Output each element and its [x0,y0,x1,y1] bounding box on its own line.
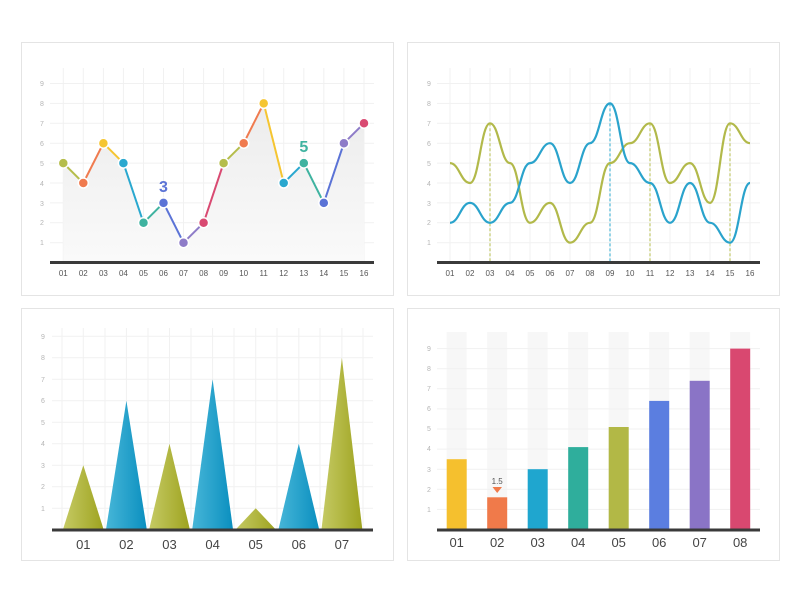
x axis labels: 03 [486,269,495,278]
x axis labels: 14 [319,269,329,278]
x axis labels: 04 [119,269,128,278]
x axis labels: 04 [205,537,220,552]
x axis labels: 07 [335,537,349,552]
y axis labels: 7 [427,386,431,393]
x axis labels: 05 [248,537,263,552]
y axis labels: 9 [427,81,431,88]
x axis labels: 02 [79,269,88,278]
y axis labels: 4 [40,181,44,188]
x axis labels: 08 [733,535,747,550]
x axis labels: 09 [219,269,229,278]
y axis labels [41,334,45,513]
panel: line chart [22,42,394,296]
y axis labels: 3 [427,467,431,474]
x axis labels: 05 [139,269,148,278]
y axis labels: 8 [427,101,431,108]
y axis labels: 8 [41,355,45,362]
data points [58,98,369,248]
y axis labels: 6 [427,406,431,413]
line segments [63,103,364,243]
x axis labels: 10 [626,269,635,278]
x axis labels: 12 [666,269,675,278]
x axis labels: 16 [360,269,369,278]
y axis labels: 5 [427,426,431,433]
x axis labels [76,537,349,552]
callout: 3: 3 [159,179,168,196]
x axis labels: 08 [586,269,595,278]
y axis labels: 7 [40,121,44,128]
callout: 1.5: 1.5 [492,477,503,486]
x axis labels [449,535,747,550]
y axis labels: 2 [427,487,431,494]
y axis labels: 9 [41,334,45,341]
green curve [450,123,750,243]
y axis labels: 3 [427,201,431,208]
y axis labels: 2 [41,484,45,491]
x axis labels: 13 [686,269,695,278]
y axis labels [427,81,431,247]
y axis labels: 3 [40,201,44,208]
y axis labels: 7 [41,377,45,384]
y axis labels: 1 [41,506,45,513]
triangles [63,358,362,530]
y axis labels: 9 [427,346,431,353]
x axis labels: 03 [162,537,177,552]
x axis labels: 02 [466,269,475,278]
blue curve [450,103,750,243]
y axis labels: 5 [41,420,45,427]
y axis labels: 8 [427,366,431,373]
x axis labels: 07 [179,269,188,278]
y axis labels: 4 [427,446,431,453]
x axis labels: 11 [260,269,268,278]
x axis labels: 04 [571,535,585,550]
x axis labels: 01 [59,269,68,278]
x axis labels: 11 [646,269,655,278]
x axis labels: 02 [490,535,504,550]
x axis labels: 12 [279,269,289,278]
y axis labels [40,81,44,247]
y axis labels: 6 [427,141,431,148]
x axis labels: 01 [446,269,455,278]
y axis labels: 5 [40,161,44,168]
y axis labels: 7 [427,121,431,128]
x axis labels: 09 [606,269,615,278]
x axis labels: 04 [506,269,515,278]
x axis labels: 06 [652,535,666,550]
x axis labels: 15 [339,269,349,278]
x axis labels: 08 [199,269,209,278]
x axis labels: 03 [99,269,108,278]
x axis labels: 13 [299,269,309,278]
dashed markers [490,103,730,262]
area fill [63,103,364,262]
x axis labels: 16 [746,269,755,278]
x axis labels: 06 [159,269,168,278]
x axis labels [59,269,369,278]
x axis labels [446,269,755,278]
x axis labels: 01 [76,537,91,552]
panel: smooth curves chart [408,42,780,296]
callout: 1.5 [492,477,503,493]
x axis labels: 06 [292,537,306,552]
x axis labels: 05 [611,535,626,550]
y axis labels: 2 [427,220,431,227]
x axis labels: 07 [692,535,707,550]
y axis labels: 6 [40,141,44,148]
y axis labels: 3 [41,463,45,470]
y axis labels: 5 [427,161,431,168]
x axis labels: 10 [239,269,249,278]
x axis labels: 14 [706,269,715,278]
callout: 5: 5 [299,139,308,156]
y axis labels: 2 [40,220,44,227]
panel: bar chart [408,308,780,560]
x axis labels: 01 [449,535,464,550]
x axis labels: 05 [526,269,535,278]
y axis labels: 4 [427,181,431,188]
x axis labels: 02 [119,537,134,552]
panel: triangle chart [22,308,394,560]
x axis labels: 06 [546,269,555,278]
x axis labels: 15 [726,269,735,278]
y axis labels: 6 [41,398,45,405]
x axis labels: 03 [530,535,545,550]
bars [447,349,750,530]
x axis labels: 07 [566,269,575,278]
y axis labels [427,346,431,514]
y axis labels: 1 [427,507,431,514]
y axis labels: 1 [427,240,431,247]
y axis labels: 1 [40,240,44,247]
y axis labels: 9 [40,81,44,88]
y axis labels: 8 [40,101,44,108]
y axis labels: 4 [41,441,45,448]
